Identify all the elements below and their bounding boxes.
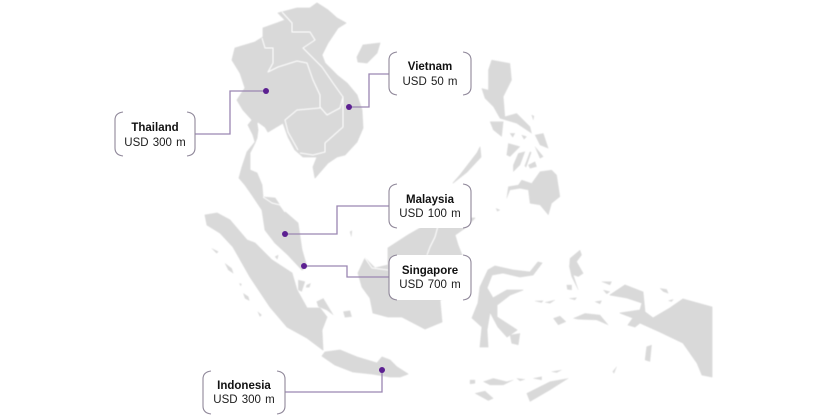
leader line: Thailand <box>195 91 266 134</box>
landmass: Sulawesi <box>472 262 542 347</box>
landmass: Papua <box>610 285 712 377</box>
callout: Thailand: Thailand <box>131 122 179 134</box>
landmass: Palawan <box>453 147 481 183</box>
landmass: Java <box>322 350 408 377</box>
landmass: Sumatra <box>205 213 327 350</box>
marker: Singapore <box>301 263 307 269</box>
callout: Thailand: USD 300 m <box>124 137 186 149</box>
callout: Malaysia: Malaysia <box>406 194 455 206</box>
landmass: eastern Indonesian islands <box>470 250 673 402</box>
marker: Thailand <box>263 88 269 94</box>
map of Southeast Asia <box>205 3 712 402</box>
leader line: Singapore <box>304 266 389 277</box>
callout: Vietnam: Vietnam <box>408 61 452 73</box>
callout: Singapore: Singapore <box>402 265 458 277</box>
marker: Malaysia <box>282 231 288 237</box>
marker: Indonesia <box>379 367 385 373</box>
callout: Singapore <box>389 255 471 300</box>
callout: Vietnam: USD 50 m <box>402 76 458 88</box>
leader line: Indonesia <box>285 370 382 392</box>
leader line: Malaysia <box>285 206 389 234</box>
leader line: Vietnam <box>349 74 389 107</box>
Borneo internal borders <box>365 226 438 270</box>
callout: Indonesia <box>203 371 285 414</box>
callout: Singapore: USD 700 m <box>399 279 461 291</box>
landmass: Sumatra and Riau small islands <box>212 231 352 317</box>
landmass: Indochina and Malay Peninsula <box>232 3 363 270</box>
callout: Vietnam <box>389 52 471 95</box>
callout: Thailand <box>115 112 195 156</box>
marker: Vietnam <box>346 104 352 110</box>
callout: Indonesia: Indonesia <box>217 380 271 392</box>
callout: Indonesia: USD 300 m <box>213 394 275 406</box>
callout: Malaysia <box>389 184 471 228</box>
landmass: Borneo <box>358 218 475 329</box>
country borders <box>262 12 343 212</box>
callout: Malaysia: USD 100 m <box>399 208 461 220</box>
landmass: Hainan <box>357 43 380 63</box>
landmass: Philippines <box>482 60 560 215</box>
